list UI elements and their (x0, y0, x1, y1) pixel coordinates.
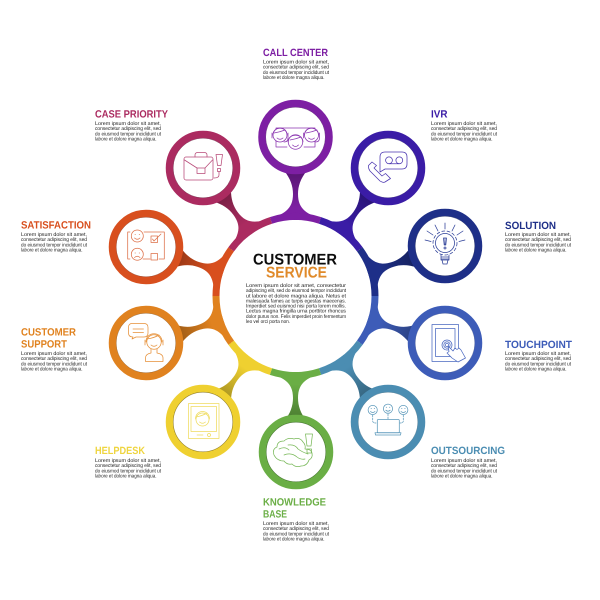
label: knowledge base: KNOWLEDGE (263, 496, 326, 508)
label: call center: CALL CENTER (263, 47, 328, 59)
label: outsourcing: OUTSOURCING (431, 445, 505, 457)
label: satisfaction: do eiusmod tempor incididunt ut (21, 242, 87, 248)
label: satisfaction (21, 219, 91, 254)
center text block: Lorem ipsum dolor sit amet, consectetur (246, 283, 346, 289)
node: satisfaction (112, 214, 180, 280)
label: knowledge base (263, 496, 329, 543)
node: helpdesk (170, 388, 236, 456)
label: satisfaction: consectetur adipiscing elit, sed (21, 237, 87, 243)
label: case priority: labore et dolore magna aliqua. (95, 137, 156, 143)
node: customer support (112, 310, 180, 376)
icon: agents with headsets (272, 128, 320, 149)
label: case priority: consectetur adipiscing elit, sed (95, 126, 161, 132)
icon: laptop with faces (368, 404, 408, 435)
center text block: malesuada fames ac turpis egestas maecenas. (246, 298, 346, 304)
label: outsourcing: do eiusmod tempor incididunt ut (431, 468, 497, 474)
label: touchpoint: do eiusmod tempor incididunt ut (505, 361, 571, 367)
label: IVR: do eiusmod tempor incididunt ut (431, 131, 497, 137)
icon: phone with voicemail bubble (368, 152, 407, 182)
label: knowledge base: do eiusmod tempor incididunt ut (263, 531, 329, 537)
node: touchpoint (412, 310, 478, 376)
center heading: SERVICE (266, 265, 327, 282)
label: touchpoint (505, 339, 573, 373)
label: touchpoint: labore et dolore magna aliqua. (505, 367, 566, 373)
label: customer support: Lorem ipsum dolor sit amet, (21, 351, 87, 357)
icon: feedback faces and checkboxes (128, 230, 164, 260)
node: IVR (354, 134, 422, 202)
label: knowledge base: BASE (263, 508, 287, 520)
label: customer support: CUSTOMER (21, 327, 76, 339)
label: helpdesk: labore et dolore magna aliqua. (95, 474, 156, 480)
center text block: dolor purus non. Felis imperdiet proin fermentum (246, 314, 346, 320)
center text block: Imperdiet sed euismod nisi porta lorem mollis. (246, 304, 346, 310)
label: IVR (431, 108, 497, 143)
label: outsourcing: Lorem ipsum dolor sit amet, (431, 458, 497, 464)
node: outsourcing (354, 388, 422, 456)
label: satisfaction: Lorem ipsum dolor sit amet, (21, 232, 87, 238)
label: satisfaction: SATISFACTION (21, 219, 91, 231)
center text block: leo vel orci porta non. (246, 319, 290, 325)
label: knowledge base: labore et dolore magna aliqua. (263, 537, 324, 543)
label: outsourcing (431, 445, 505, 480)
node: knowledge base (262, 418, 330, 486)
label: touchpoint: Lorem ipsum dolor sit amet, (505, 351, 571, 357)
center text block: Lectus magna fringilla urna porttitor rhoncus (246, 309, 346, 315)
label: IVR: consectetur adipiscing elit, sed (431, 126, 497, 132)
label: customer support: labore et dolore magna aliqua. (21, 367, 82, 373)
label: helpdesk: consectetur adipiscing elit, sed (95, 463, 161, 469)
label: knowledge base: consectetur adipiscing elit, sed (263, 526, 329, 532)
label: customer support: consectetur adipiscing elit, sed (21, 356, 87, 362)
label: customer support: do eiusmod tempor incididunt ut (21, 361, 87, 367)
center text block: ut labore et dolore magna aliqua. Netus et (246, 293, 347, 299)
node: case priority (170, 134, 236, 202)
label: case priority: Lorem ipsum dolor sit amet, (95, 121, 161, 127)
central ring with connectors (168, 171, 423, 421)
node: call center (262, 104, 329, 170)
label: outsourcing: consectetur adipiscing elit, sed (431, 463, 497, 469)
label: call center: do eiusmod tempor incididunt ut (263, 70, 329, 76)
label: customer support: SUPPORT (21, 338, 68, 350)
label: solution: labore et dolore magna aliqua. (505, 248, 566, 254)
label: helpdesk: do eiusmod tempor incididunt ut (95, 468, 161, 474)
label: IVR: Lorem ipsum dolor sit amet, (431, 121, 497, 127)
label: helpdesk: Lorem ipsum dolor sit amet, (95, 458, 161, 464)
icon: tablet with agent face (188, 404, 219, 438)
label: satisfaction: labore et dolore magna aliqua. (21, 248, 82, 254)
label: solution: SOLUTION (505, 220, 556, 232)
label: case priority (95, 108, 168, 143)
label: solution (505, 220, 571, 254)
label: helpdesk: HELPDESK (95, 445, 145, 457)
label: customer support (21, 327, 87, 373)
label: helpdesk (95, 445, 161, 480)
icon: brain with exclamation mark (273, 434, 312, 467)
label: call center: Lorem ipsum dolor sit amet, (263, 60, 329, 66)
label: case priority: CASE PRIORITY (95, 108, 168, 120)
label: solution: consectetur adipiscing elit, sed (505, 237, 571, 243)
label: outsourcing: labore et dolore magna aliqua. (431, 474, 492, 480)
label: touchpoint: consectetur adipiscing elit, sed (505, 356, 571, 362)
label: call center (263, 47, 329, 81)
center text block: adipiscing elit, sed do eiusmod tempor incididunt (246, 288, 346, 294)
icon: touchscreen tablet with hand (432, 324, 466, 362)
center text block (246, 283, 347, 325)
label: knowledge base: Lorem ipsum dolor sit amet, (263, 521, 329, 527)
label: call center: consectetur adipiscing elit, sed (263, 65, 329, 71)
center heading (253, 251, 337, 282)
label: call center: labore et dolore magna aliqua. (263, 75, 324, 81)
label: case priority: do eiusmod tempor incididunt ut (95, 131, 161, 137)
label: IVR: labore et dolore magna aliqua. (431, 137, 492, 143)
icon: agent with speech bubble (128, 324, 163, 362)
label: IVR: IVR (431, 108, 448, 120)
label: solution: Lorem ipsum dolor sit amet, (505, 232, 571, 238)
node: solution (412, 212, 478, 280)
label: solution: do eiusmod tempor incididunt ut (505, 242, 571, 248)
label: touchpoint: TOUCHPOINT (505, 339, 573, 351)
center heading: CUSTOMER (253, 251, 337, 268)
icon: briefcase with exclamation mark (184, 152, 222, 180)
icon: light bulb gear (425, 223, 465, 264)
